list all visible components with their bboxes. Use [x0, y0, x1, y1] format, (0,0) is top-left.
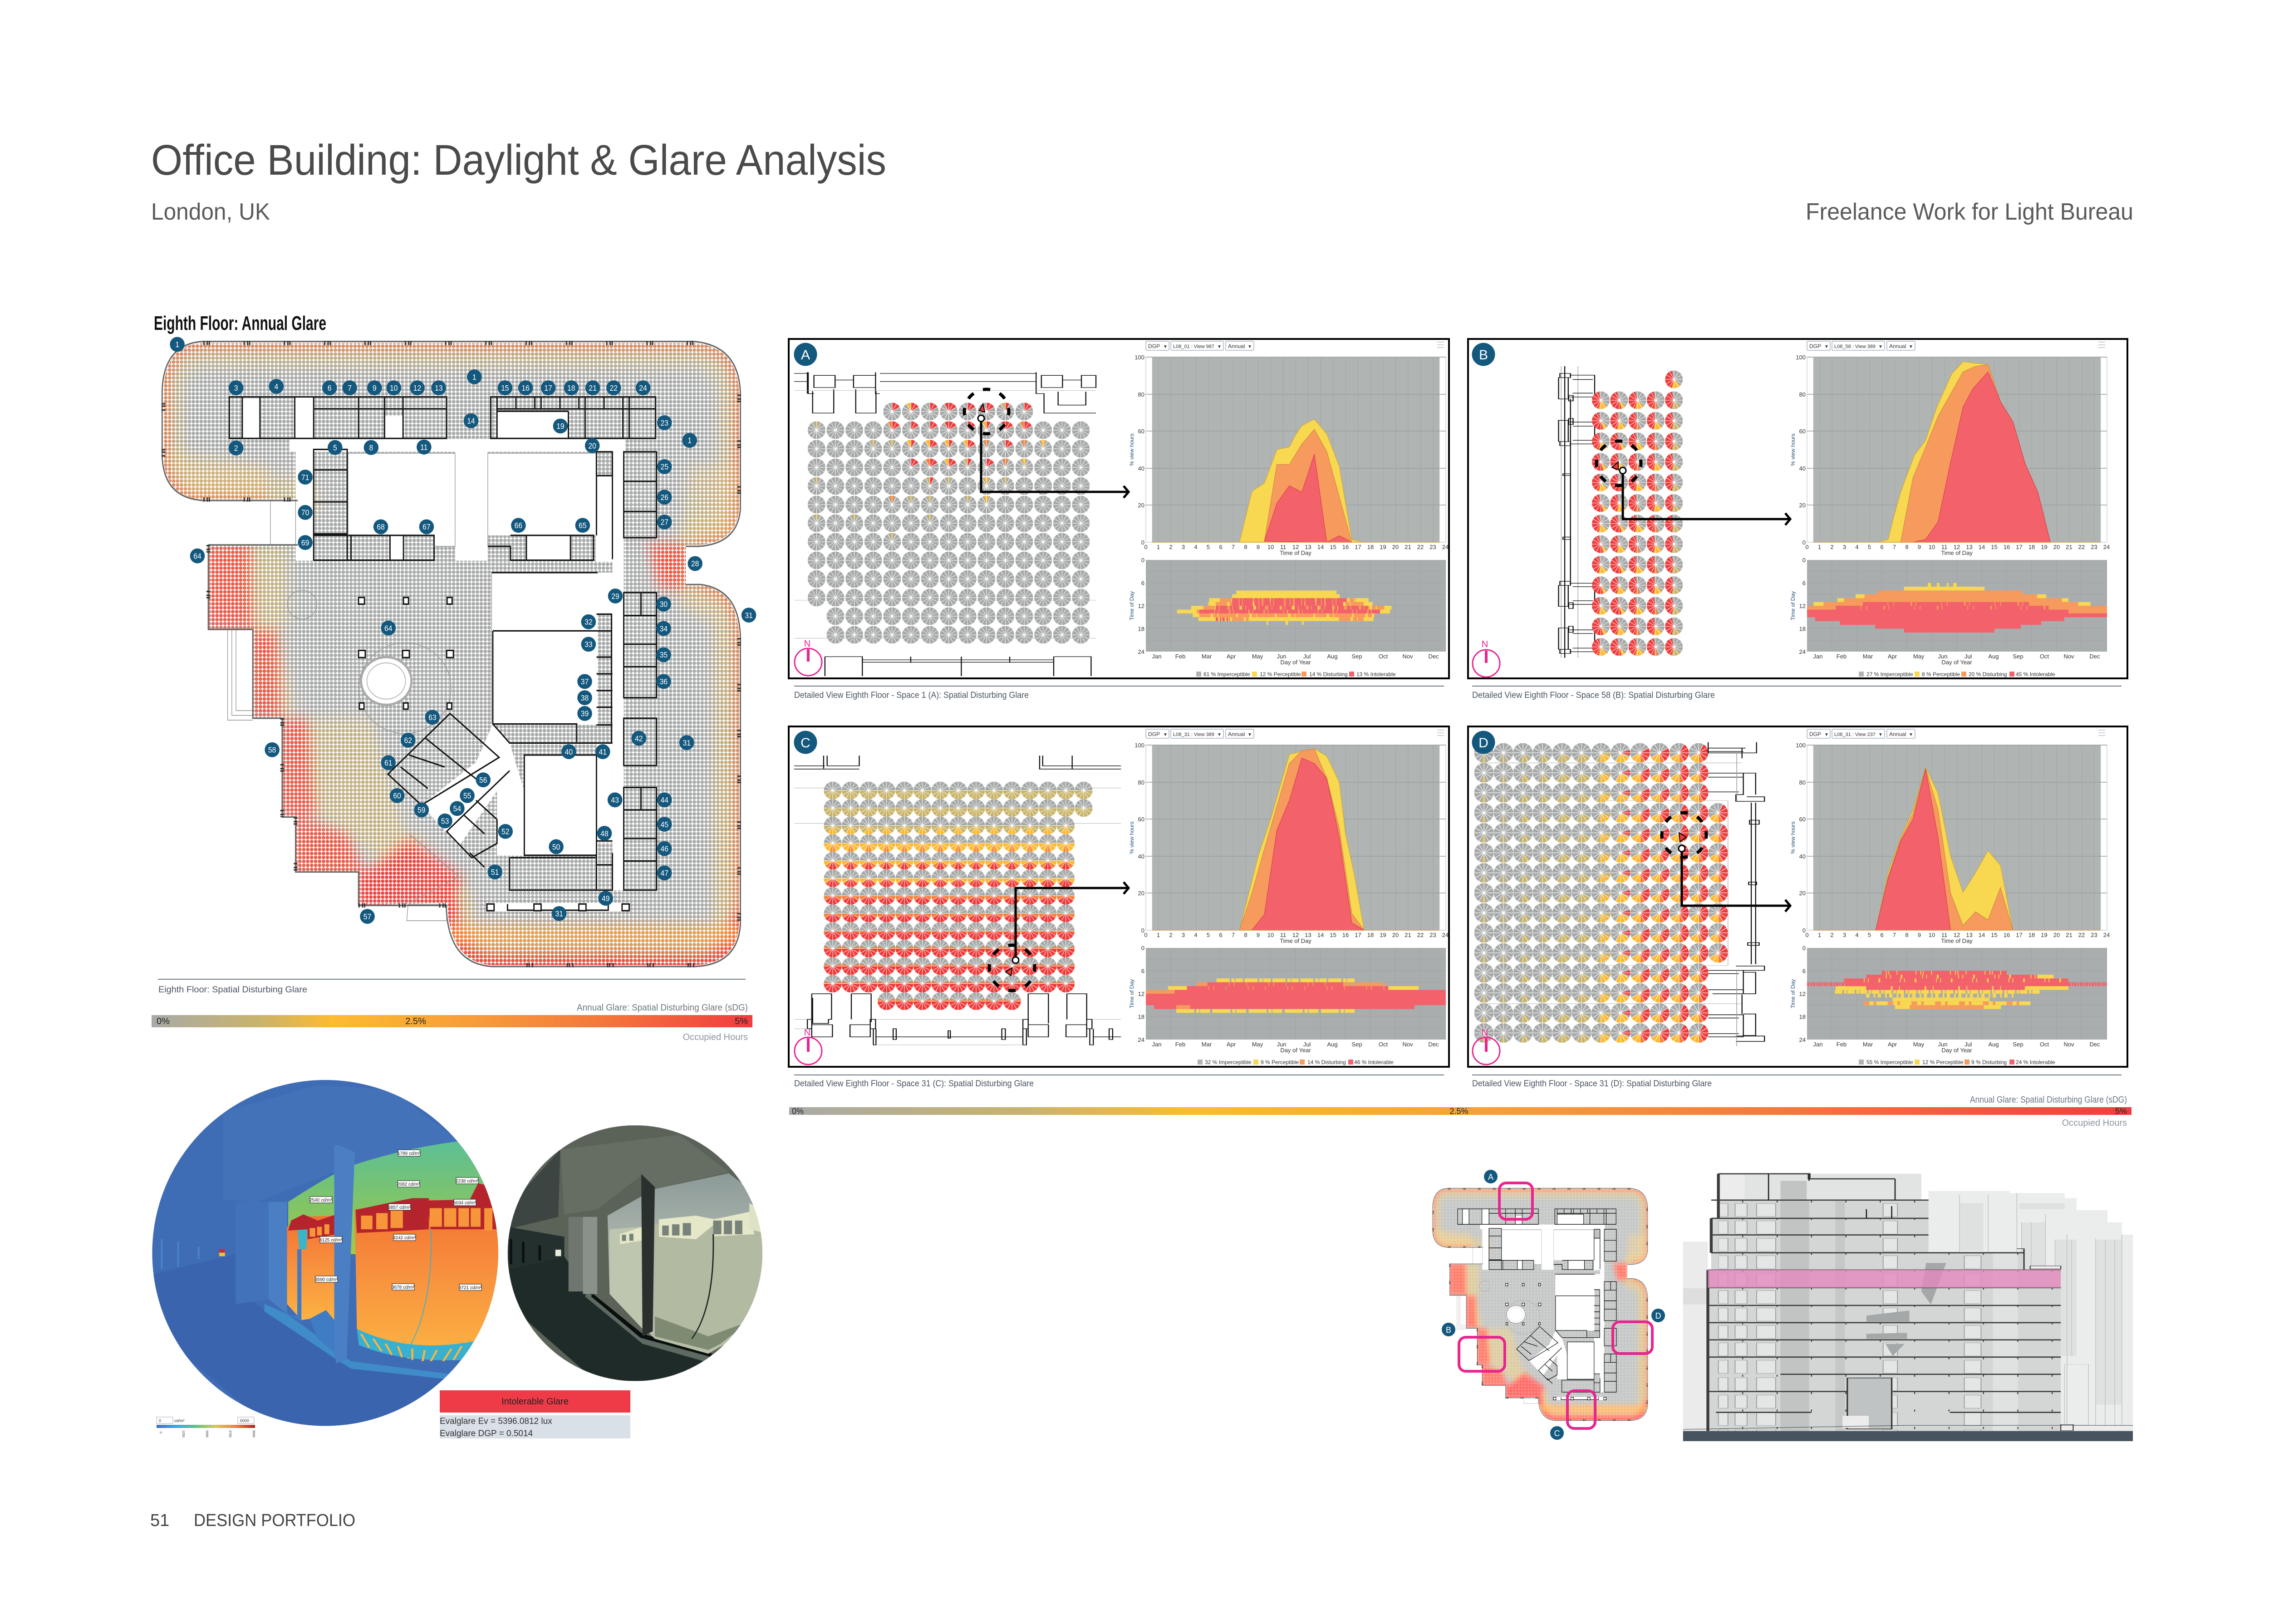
- numbered space markers: 54: [453, 804, 461, 813]
- numbered space markers: [170, 337, 756, 924]
- luminance value labels: [309, 1150, 482, 1290]
- subtitle: location: London, UK: [151, 199, 270, 225]
- numbered space markers: 69: [301, 538, 309, 547]
- luminance legend: [157, 1417, 255, 1438]
- scale values: 2.5%: [1449, 1107, 1468, 1116]
- numbered space markers: 47: [660, 868, 668, 878]
- selected view marker and arrow D: [1662, 813, 1790, 912]
- numbered space markers: 22: [610, 383, 618, 393]
- numbered space markers: 56: [479, 775, 487, 785]
- legend D: [1859, 1059, 2055, 1065]
- luminance legend: 3750: [228, 1430, 231, 1438]
- viewpoint grid B: [1591, 370, 1683, 657]
- numbered space markers: 61: [384, 758, 392, 767]
- luminance value labels: 2540 cd/m²: [309, 1198, 333, 1203]
- luminance value labels: 3721 cd/m²: [459, 1285, 482, 1290]
- legend D: 9 % Disturbing: [1971, 1059, 2007, 1065]
- legend C: 9 % Perceptible: [1261, 1059, 1299, 1065]
- numbered space markers: 68: [377, 522, 385, 531]
- numbered space markers: 63: [428, 713, 437, 722]
- plan caption and scale: [152, 979, 752, 1042]
- selected view marker and arrow A: [964, 389, 1129, 498]
- numbered space markers: 7: [348, 383, 352, 393]
- numbered space markers: 23: [660, 418, 668, 427]
- numbered space markers: 49: [602, 894, 609, 903]
- panel C: detailed view space 31: [789, 726, 1449, 1067]
- numbered space markers: 48: [600, 829, 609, 838]
- frame: [789, 339, 1449, 678]
- numbered space markers: 12: [413, 383, 421, 393]
- heat map B: [1807, 585, 2107, 631]
- numbered space markers: 17: [544, 383, 552, 393]
- legend B: 27 % Imperceptible: [1866, 671, 1913, 677]
- numbered space markers: 8: [369, 443, 373, 452]
- selected view marker and arrow B: [1596, 441, 1790, 525]
- panel B: detailed view space 58: [1468, 339, 2127, 678]
- numbered space markers: 6: [328, 383, 332, 393]
- luminance legend: 0: [159, 1432, 162, 1433]
- compass B: N: [1482, 639, 1488, 649]
- numbered space markers: 31: [683, 738, 691, 747]
- scale values: 2.5%: [405, 1016, 426, 1026]
- building drawing B: [1558, 366, 1595, 658]
- panel: eighth floor glare plan: [136, 309, 794, 1057]
- compass A: [795, 639, 822, 676]
- legend A: 14 % Disturbing: [1309, 671, 1348, 677]
- frame: [1468, 339, 2127, 678]
- panel D: detailed view space 31: [1468, 726, 2127, 1067]
- numbered space markers: 16: [521, 383, 530, 393]
- numbered space markers: 45: [660, 820, 668, 829]
- area chart D: [1813, 767, 2100, 930]
- locator badge letters: [1446, 1173, 1661, 1438]
- gradient bar: [789, 1107, 2131, 1115]
- numbered space markers: 1: [472, 373, 476, 382]
- numbered space markers: 52: [501, 827, 509, 836]
- legend A: [1196, 671, 1396, 677]
- scale label: Annual Glare: Spatial Disturbing Glare (sDG): [577, 1003, 748, 1013]
- numbered space markers: 18: [567, 383, 575, 393]
- numbered space markers: 1: [688, 436, 692, 445]
- legend C: [1198, 1059, 1394, 1065]
- caption B: Detailed View Eighth Floor - Space 58 (B): Spatial Disturbing Glare: [1472, 691, 1715, 700]
- numbered space markers: 11: [420, 443, 428, 452]
- caption A: Detailed View Eighth Floor - Space 1 (A): Spatial Disturbing Glare: [794, 691, 1029, 700]
- key plan with locators: [1423, 1170, 1668, 1454]
- numbered space markers: 28: [691, 559, 699, 568]
- locator badge letters: D: [1655, 1311, 1661, 1320]
- badge D: D: [1478, 736, 1488, 751]
- heat map C: [1146, 981, 1446, 1011]
- viewpoint grid D: [1474, 743, 1728, 1043]
- numbered space markers: 67: [422, 522, 431, 531]
- heading: eighth floor annual glare: Eighth Floor: Annual Glare: [154, 312, 326, 334]
- badge B: B: [1479, 348, 1488, 363]
- numbered space markers: 31: [555, 909, 563, 918]
- key plan drawing: [1423, 1176, 1668, 1454]
- charts A: L08_01 : View 987: [1173, 344, 1214, 349]
- heat map D: [1807, 973, 2107, 1007]
- charts C: L08_31 : View 389: [1173, 732, 1214, 737]
- badge A: A: [801, 348, 810, 363]
- numbered space markers: 36: [660, 677, 668, 686]
- numbered space markers: 39: [581, 709, 589, 718]
- legend A: 13 % Intolerable: [1356, 671, 1396, 677]
- numbered space markers: 19: [556, 422, 565, 431]
- panel A: detailed view space 1: [789, 339, 1449, 678]
- numbered space markers: 10: [390, 383, 398, 393]
- numbered space markers: 20: [588, 441, 596, 451]
- numbered space markers: 13: [435, 383, 442, 393]
- compass A: N: [804, 639, 810, 649]
- legend B: 20 % Disturbing: [1969, 671, 2007, 677]
- luminance value labels: 4125 cd/m²: [319, 1238, 343, 1243]
- legend D: 12 % Perceptible: [1922, 1059, 1964, 1065]
- area chart A: [1152, 419, 1439, 542]
- badge A: [794, 343, 817, 366]
- numbered space markers: 15: [501, 383, 509, 393]
- legend C: 14 % Disturbing: [1307, 1059, 1346, 1065]
- numbered space markers: 43: [611, 795, 619, 805]
- locator badge letters: B: [1446, 1325, 1451, 1335]
- badge B: [1472, 343, 1495, 366]
- luminance value labels: 4242 cd/m²: [393, 1236, 416, 1241]
- compass C: N: [804, 1028, 810, 1038]
- luminance legend: 0: [159, 1418, 161, 1423]
- area chart B: [1813, 362, 2100, 542]
- numbered space markers: 32: [584, 618, 593, 627]
- numbered space markers: 40: [565, 747, 573, 756]
- numbered space markers: 55: [463, 791, 471, 800]
- charts B: [1790, 341, 2110, 677]
- compass D: N: [1482, 1028, 1488, 1038]
- locator badge letters: C: [1554, 1429, 1560, 1438]
- luminance legend: cd/m²: [174, 1418, 185, 1423]
- numbered space markers: 1: [175, 340, 179, 349]
- occupied hours label: Occupied Hours: [683, 1032, 748, 1042]
- highlighted eighth floor band: [1708, 1270, 2061, 1288]
- numbered space markers: 53: [441, 816, 449, 826]
- legend B: 45 % Intolerable: [2016, 671, 2055, 677]
- luminance value labels: 2238 cd/m²: [456, 1179, 479, 1184]
- luminance map: [145, 1080, 511, 1428]
- legend B: [1859, 671, 2055, 677]
- verdict: intolerable glare: Intolerable Glare: [501, 1397, 569, 1407]
- numbered space markers: 21: [589, 383, 597, 393]
- numbered space markers: 26: [660, 493, 668, 502]
- luminance value labels: 2082 cd/m²: [397, 1182, 420, 1187]
- evalglare results: Evalglare DGP = 0.5014: [440, 1429, 533, 1438]
- evalglare results: Evalglare Ev = 5396.0812 lux: [440, 1417, 552, 1426]
- building drawing C: [794, 756, 1121, 1045]
- scale label: Annual Glare: Spatial Disturbing Glare (sDG): [1970, 1095, 2127, 1105]
- numbered space markers: 38: [581, 693, 589, 702]
- scale values: [157, 1016, 748, 1026]
- numbered space markers: 5: [333, 443, 337, 452]
- scale values: [792, 1107, 2127, 1116]
- numbered space markers: 50: [552, 842, 560, 852]
- legend C: 32 % Imperceptible: [1205, 1059, 1252, 1065]
- rendered greyscale fisheye: [507, 1125, 770, 1382]
- numbered space markers: 44: [660, 795, 668, 805]
- false colour luminance fisheye: [145, 1080, 511, 1428]
- numbered space markers: 2: [234, 444, 238, 453]
- numbered space markers: 27: [660, 518, 668, 527]
- evalglare results: [440, 1415, 630, 1438]
- caption: eighth floor: Eighth Floor: Spatial Disturbing Glare: [158, 985, 307, 995]
- scale values: 0%: [792, 1107, 804, 1116]
- occupied hours: Occupied Hours: [2062, 1118, 2127, 1128]
- luminance value labels: 3678 cd/m²: [392, 1285, 415, 1290]
- numbered space markers: 31: [745, 611, 753, 620]
- charts C: [1129, 729, 1449, 1065]
- luminance legend: 5000: [252, 1430, 255, 1438]
- numbered space markers: 14: [467, 417, 475, 426]
- luminance value labels: 5034 cd/m²: [453, 1201, 476, 1206]
- footer: page number: 51: [150, 1511, 169, 1530]
- numbered space markers: 42: [635, 734, 643, 743]
- numbered space markers: 4: [274, 382, 278, 391]
- numbered space markers: 37: [581, 677, 589, 686]
- scale values: 5%: [2115, 1107, 2127, 1116]
- numbered space markers: 62: [404, 736, 412, 745]
- numbered space markers: 59: [417, 805, 426, 814]
- numbered space markers: 34: [660, 624, 668, 633]
- luminance value labels: 1789 cd/m²: [398, 1151, 421, 1156]
- numbered space markers: 41: [599, 747, 607, 756]
- area chart C: [1152, 749, 1439, 930]
- legend C: 46 % Intolerable: [1354, 1059, 1394, 1065]
- verdict: intolerable glare: [440, 1390, 630, 1413]
- numbered space markers: 64: [193, 551, 201, 561]
- luminance value labels: 3590 cd/m²: [315, 1277, 338, 1282]
- legend A: 61 % Imperceptible: [1203, 671, 1250, 677]
- viewpoint grid A: [807, 402, 1090, 644]
- building section: [1683, 1174, 2133, 1441]
- numbered space markers: 30: [660, 600, 668, 609]
- footer: portfolio label: DESIGN PORTFOLIO: [194, 1511, 355, 1530]
- numbered space markers: 51: [491, 868, 499, 877]
- numbered space markers: 58: [268, 746, 276, 755]
- subtitle: client: Freelance Work for Light Bureau: [1806, 199, 2133, 225]
- badge C: [794, 731, 817, 754]
- numbered space markers: 35: [660, 650, 668, 659]
- luminance legend: 5000: [240, 1418, 249, 1423]
- charts D: [1790, 729, 2110, 1065]
- viewpoint grid C: [824, 782, 1093, 1010]
- legend A: 12 % Perceptible: [1260, 671, 1301, 677]
- compass B: [1473, 639, 1500, 677]
- numbered space markers: 70: [301, 508, 309, 517]
- numbered space markers: 66: [515, 521, 522, 530]
- numbered space markers: 33: [584, 640, 593, 649]
- charts A: [1129, 341, 1449, 677]
- scale values: 5%: [735, 1016, 748, 1026]
- caption D: Detailed View Eighth Floor - Space 31 (D): Spatial Disturbing Glare: [1472, 1079, 1712, 1089]
- luminance legend: 2500: [205, 1430, 208, 1438]
- numbered space markers: 64: [384, 623, 392, 633]
- title: Office Building: Daylight & Glare Analysis: [151, 136, 886, 184]
- numbered space markers: 25: [660, 462, 668, 471]
- numbered space markers: 9: [373, 383, 377, 393]
- numbered space markers: 3: [234, 383, 238, 393]
- charts D: L08_31 : View 237: [1834, 732, 1876, 737]
- building drawing D: [1479, 742, 1764, 1046]
- locator badge letters: A: [1488, 1173, 1493, 1182]
- charts B: L08_58 : View 389: [1834, 344, 1876, 349]
- legend B: 8 % Perceptible: [1922, 671, 1960, 677]
- numbered space markers: 57: [363, 912, 371, 921]
- gradient scale bar: [152, 1015, 752, 1027]
- legend D: 24 % Intolerable: [2016, 1059, 2055, 1065]
- locator badges: [1442, 1170, 1665, 1440]
- numbered space markers: 24: [639, 383, 647, 393]
- scale values: 0%: [157, 1016, 170, 1026]
- badge D: [1472, 731, 1495, 754]
- luminance legend: 1250: [182, 1430, 185, 1438]
- building drawing A: [794, 372, 1096, 676]
- floor plan drawing: [136, 309, 794, 1057]
- luminance value labels: 5857 cd/m²: [388, 1205, 411, 1210]
- locator frames: [1459, 1183, 1652, 1428]
- compass C: [795, 1028, 822, 1065]
- heat map A: [1177, 593, 1391, 623]
- numbered space markers: 46: [660, 844, 668, 854]
- frame: [1468, 726, 2127, 1067]
- numbered space markers: 60: [393, 791, 401, 800]
- selected view marker and arrow C: [989, 882, 1129, 991]
- wide gradient scale: [789, 1095, 2131, 1128]
- numbered space markers: 71: [301, 473, 309, 482]
- frame: [789, 726, 1449, 1067]
- numbered space markers: 29: [611, 592, 619, 601]
- compass D: [1473, 1028, 1500, 1065]
- caption C: Detailed View Eighth Floor - Space 31 (C): Spatial Disturbing Glare: [794, 1079, 1034, 1089]
- badge C: C: [801, 736, 810, 751]
- numbered space markers: 65: [579, 521, 587, 530]
- legend D: 55 % Imperceptible: [1866, 1059, 1913, 1065]
